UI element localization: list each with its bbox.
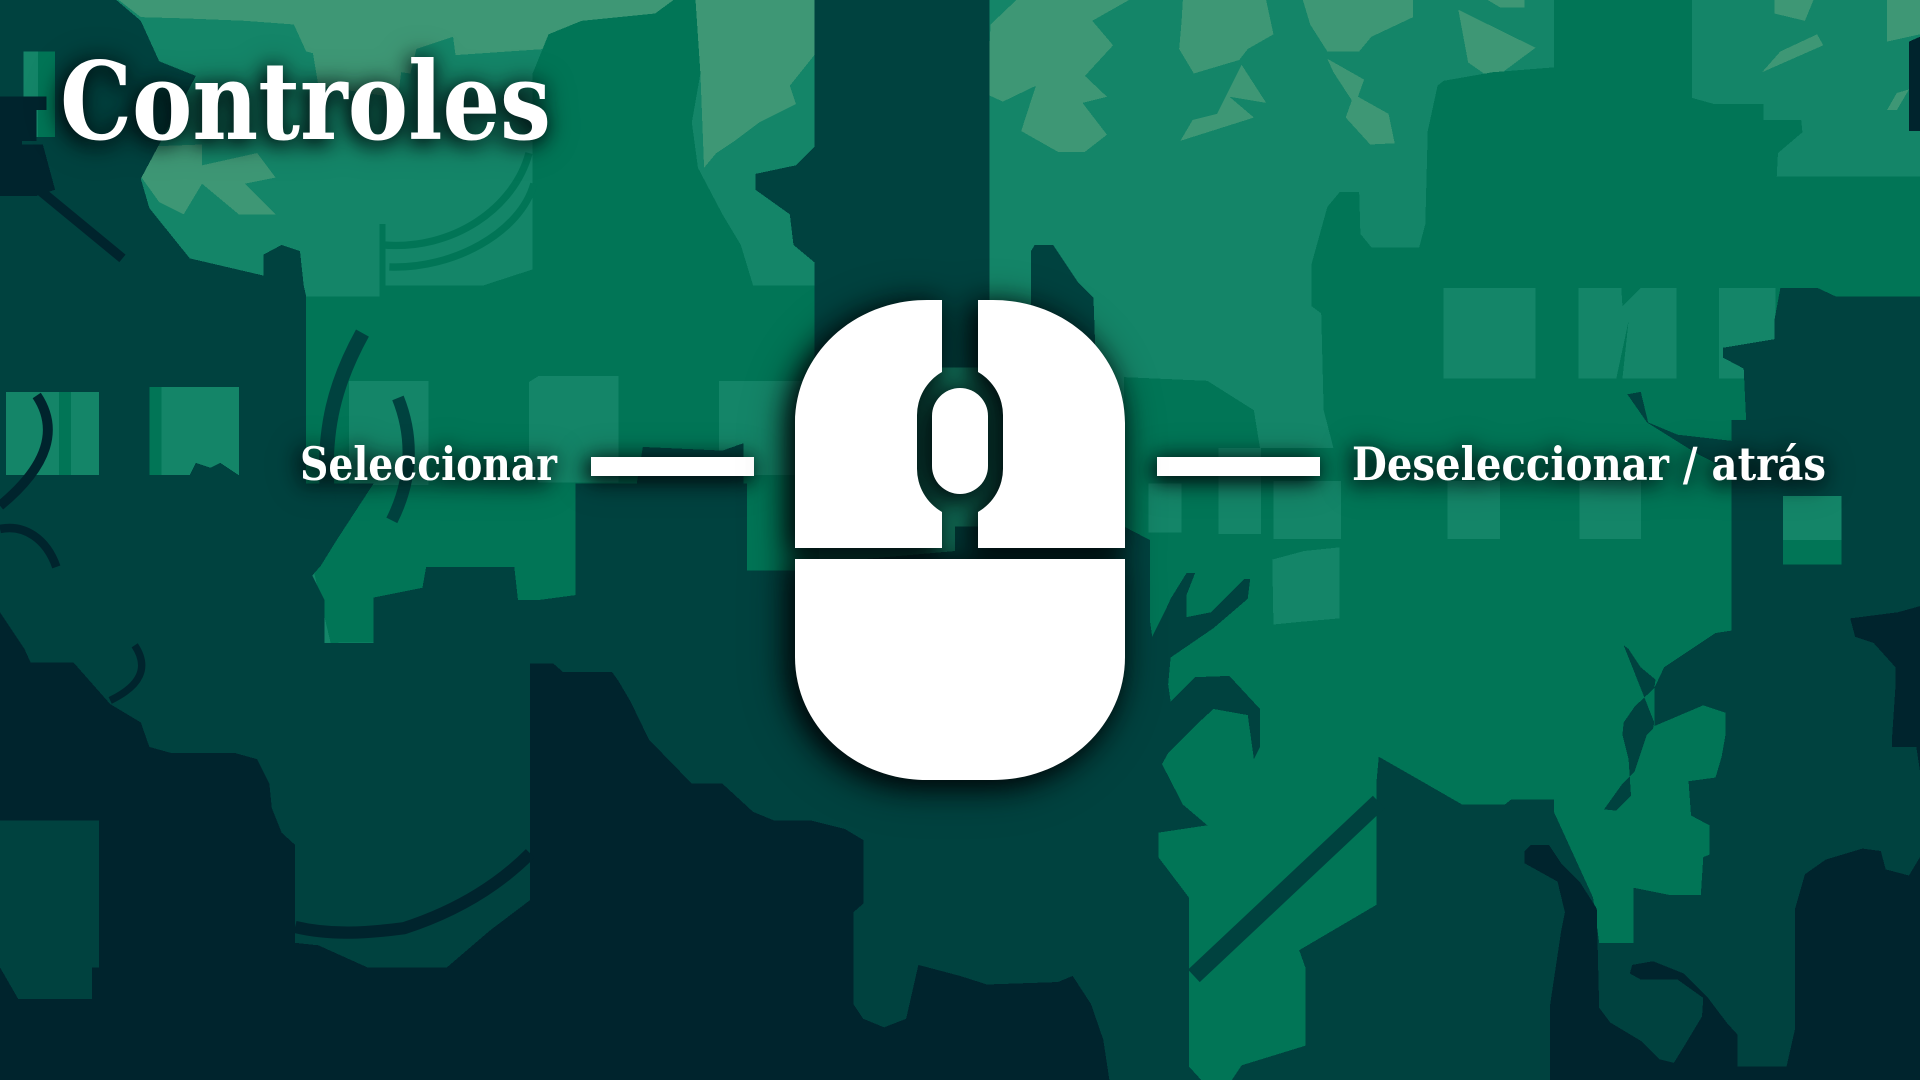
green window in dark lower-left (0, 820, 99, 999)
darkest vines (0, 190, 530, 933)
mid green right foliage (1124, 0, 1920, 1080)
title: Controles (60, 39, 551, 165)
connector: left button (591, 457, 754, 476)
icon: mouse (795, 300, 1125, 780)
mouse right button (978, 300, 1125, 548)
connector: right button (1157, 457, 1320, 476)
lighter window shapes (349, 288, 1776, 624)
mouse body (795, 559, 1125, 780)
mouse left button (795, 300, 942, 548)
windows over dark trees (6, 51, 1842, 571)
dark branches on green (326, 333, 1379, 976)
lightest foliage (119, 0, 1920, 214)
mid green arcs on sky (382, 153, 534, 267)
mid green left and centre foliage (306, 0, 820, 643)
label: left button: Seleccionar (300, 437, 558, 491)
label: right button: Deseleccionar / atrás (1352, 437, 1826, 491)
mouse scroll wheel (932, 388, 988, 494)
